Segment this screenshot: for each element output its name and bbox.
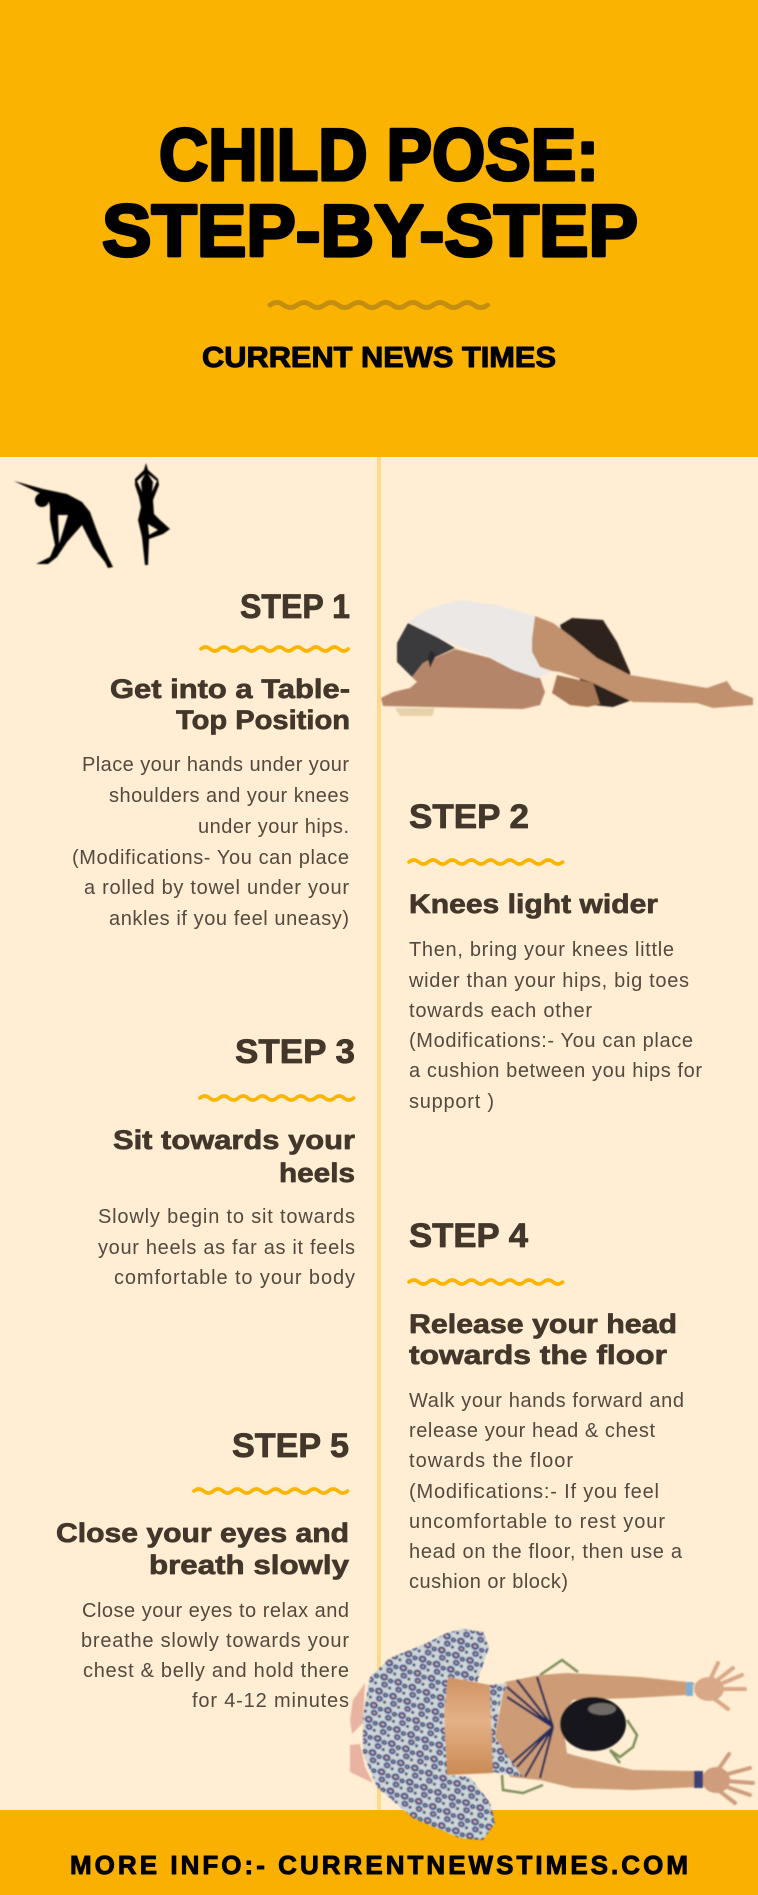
hand: upper (694, 1663, 745, 1709)
icon: stretching silhouettes (14, 463, 170, 568)
step 2 label: STEP 2 (409, 798, 529, 836)
wristbands (686, 1682, 693, 1696)
step 2 text: a cushion between you hips for (409, 1060, 702, 1082)
step 1 text: shoulders and your knees (109, 785, 349, 807)
icon: tree pose silhouette (135, 463, 170, 565)
step 5 heading: Close your eyes and (56, 1518, 349, 1548)
step 4 text: towards the floor (409, 1450, 573, 1472)
step 2 squiggle (409, 860, 563, 864)
step 1 text: (Modifications- You can place (72, 847, 349, 869)
arms and upper back (495, 1673, 699, 1790)
step 3 heading: Sit towards your (113, 1125, 356, 1155)
step 4 text: release your head & chest (409, 1420, 655, 1442)
step 2 text: wider than your hips, big toes (408, 970, 689, 992)
step 4 heading: towards the floor (409, 1340, 668, 1370)
step 3 label: STEP 3 (235, 1033, 355, 1071)
step 4 text (409, 1390, 684, 1593)
step 3 text: Slowly begin to sit towards (98, 1206, 355, 1228)
hand: lower (702, 1754, 753, 1803)
step 1 heading: Top Position (176, 705, 350, 735)
step 5 (56, 1427, 349, 1712)
step 2 text (408, 939, 702, 1113)
feet (350, 1683, 373, 1783)
step 1 text: under your hips. (198, 816, 349, 838)
step 3 text: comfortable to your body (114, 1267, 355, 1289)
step 5 text: breathe slowly towards your (81, 1630, 349, 1652)
step 4 squiggle (409, 1280, 563, 1284)
straps (507, 1677, 553, 1778)
step 5 squiggle (194, 1489, 348, 1493)
step 3 squiggle (200, 1096, 354, 1100)
step 2 (408, 798, 702, 1113)
step 2 text: towards each other (409, 1000, 592, 1022)
step 2 text: (Modifications:- You can place (409, 1030, 693, 1052)
step 4 text: cushion or block) (409, 1571, 568, 1593)
title: STEP-BY-STEP (102, 191, 638, 272)
step 1 text: Place your hands under your (82, 754, 349, 776)
step 3 (98, 1033, 356, 1289)
subtitle: CURRENT NEWS TIMES (202, 342, 556, 374)
step 5 text: for 4-12 minutes (192, 1690, 349, 1712)
step 4 text: Walk your hands forward and (409, 1390, 684, 1412)
centre divider (377, 457, 381, 1810)
step 2 text: Then, bring your knees little (409, 939, 674, 961)
footer text: MORE INFO:- CURRENTNEWSTIMES.COM (70, 1850, 688, 1880)
step 1 heading (110, 674, 350, 735)
step 1 squiggle (201, 647, 348, 651)
step 4 text: uncomfortable to rest your (409, 1511, 665, 1533)
step 5 heading (56, 1518, 349, 1580)
step 5 text: Close your eyes to relax and (82, 1600, 349, 1622)
hair (560, 1697, 626, 1751)
step 1 text: ankles if you feel uneasy) (109, 908, 349, 930)
step 5 text (81, 1600, 349, 1712)
step 1 (72, 588, 350, 930)
header squiggle (270, 302, 488, 308)
step 1 label: STEP 1 (240, 588, 350, 626)
step 4 label: STEP 4 (409, 1217, 528, 1255)
illustration: child pose top view (350, 1629, 753, 1840)
step 3 heading (113, 1125, 356, 1188)
step 2 text: support ) (409, 1091, 494, 1113)
step 4 heading: Release your head (409, 1309, 677, 1339)
lower back (444, 1677, 493, 1775)
icon: triangle pose silhouette (14, 481, 113, 568)
panel: footer (0, 1810, 758, 1895)
step 4 text: (Modifications:- If you feel (409, 1481, 659, 1503)
step 4 (409, 1217, 684, 1593)
step 3 heading: heels (279, 1158, 355, 1188)
step 3 text: your heels as far as it feels (98, 1237, 355, 1259)
step 2 heading: Knees light wider (409, 889, 659, 919)
panel: header (0, 0, 758, 457)
step 1 heading: Get into a Table- (110, 674, 350, 704)
step 5 label: STEP 5 (232, 1427, 349, 1465)
illustration: child pose side view (381, 600, 753, 716)
step 5 text: chest & belly and hold there (83, 1660, 349, 1682)
step 4 heading (409, 1309, 677, 1370)
title: CHILD POSE: (159, 115, 599, 196)
title (102, 115, 638, 272)
leopard band (490, 1683, 523, 1777)
mandala mat outline (502, 1660, 637, 1793)
step 1 text: a rolled by towel under your (84, 877, 349, 899)
step 3 text (98, 1206, 355, 1289)
step 5 heading: breath slowly (149, 1550, 349, 1580)
step 1 text (72, 754, 349, 930)
leopard leggings (363, 1629, 495, 1840)
step 4 text: head on the floor, then use a (409, 1541, 683, 1563)
